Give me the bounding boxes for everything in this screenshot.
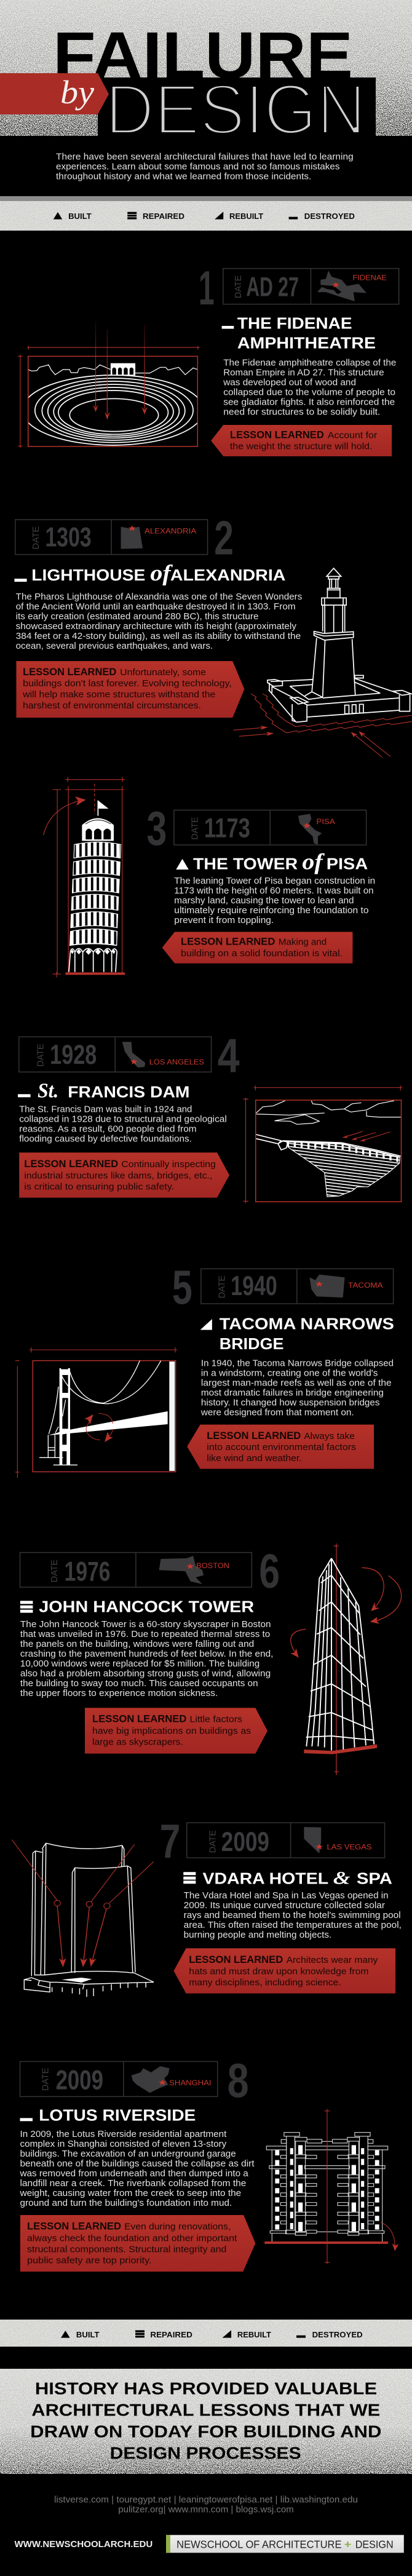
- body text: [223, 358, 396, 417]
- body text: that was unveiled in 1976. Due to repeated thermal stress to: [20, 1630, 270, 1639]
- illustration: leaning tower: [44, 777, 125, 977]
- body text: buildings. The excavation of an underground garage: [20, 2149, 236, 2158]
- callout: lesson learned: public safety are top priority.: [27, 2256, 152, 2265]
- heading: LOTUS RIVERSIDE: [39, 2107, 196, 2124]
- callout: lesson learned: like wind and weather.: [207, 1454, 302, 1463]
- body text: burning people and melting objects.: [184, 1930, 331, 1940]
- date and location box: 1928: [50, 1039, 97, 1070]
- date and location box: 2009: [56, 2064, 103, 2095]
- callout: lesson learned: building on a solid foundation is vital.: [181, 949, 343, 958]
- heading: LIGHTHOUSE: [31, 566, 145, 584]
- body text: [174, 876, 375, 925]
- body text: prevent it from toppling.: [174, 916, 274, 925]
- heading: AMPHITHEATRE: [237, 335, 376, 352]
- callout: lesson learned: LESSON LEARNED: [24, 1159, 118, 1170]
- illustration: dam: [243, 1085, 403, 1203]
- number 6: 6: [259, 1544, 280, 1598]
- body text: also had a problem absorbing strong gusts of wind, allowing: [20, 1669, 271, 1678]
- body text: complex in Shanghai consisted of eleven 13-story: [20, 2139, 227, 2149]
- panel: 4 St. Francis Dam: [18, 1029, 403, 1203]
- body text: the building to sway too much. This caused occupants on: [20, 1679, 258, 1688]
- callout: lesson learned: LESSON LEARNED: [27, 2221, 121, 2232]
- panel: 6 John Hancock Tower: [20, 1544, 402, 1775]
- heading: ALEXANDRIA: [170, 566, 285, 584]
- sources: pulitzer.org| www.mnn.com | blogs.wsj.com: [118, 2505, 294, 2515]
- heading: [183, 1868, 392, 1888]
- callout: lesson learned: [85, 1708, 267, 1754]
- body text: ground and turn the building's foundation into mud.: [20, 2198, 232, 2208]
- body text: The St. Francis Dam was built in 1924 and: [19, 1104, 192, 1114]
- callout: lesson learned: [211, 425, 392, 456]
- number 3: 3: [146, 802, 167, 855]
- callout: lesson learned: [19, 1152, 229, 1198]
- heading: [176, 849, 368, 874]
- heading: [18, 1080, 190, 1102]
- body text: flooding caused by defective foundations.: [19, 1134, 192, 1144]
- callout: lesson learned: LESSON LEARNED: [207, 1430, 301, 1441]
- number 8: 8: [228, 2054, 249, 2107]
- body text: weight, causing water from the creek to seep into the: [20, 2189, 241, 2198]
- date and location box: SHANGHAI: [169, 2079, 212, 2087]
- callout: lesson learned: [16, 661, 244, 718]
- intro text: throughout history and what we learned from those incidents.: [56, 172, 311, 181]
- callout: lesson learned: [187, 1425, 374, 1469]
- red arrow banner: [0, 73, 109, 114]
- heading: THE FIDENAE: [237, 315, 352, 332]
- body text: 1173 with the height of 60 meters. It was built on: [174, 886, 374, 895]
- heading: THE TOWER: [193, 855, 298, 873]
- body text: The leaning Tower of Pisa began construction in: [174, 876, 375, 886]
- panel: 8 Lotus Riverside: [20, 2054, 398, 2272]
- date and location box: DATE: [216, 1275, 227, 1298]
- date and location box: TACOMA: [348, 1282, 383, 1290]
- body text: need for structures to be solidly built.: [223, 407, 380, 417]
- callout: lesson learned: into account environmental factors: [207, 1443, 356, 1452]
- legend: top: REBUILT: [229, 213, 263, 221]
- body text: crashing to the pavement hundreds of feet below. In the end,: [20, 1649, 273, 1659]
- callout: lesson learned: Even during renovations,: [124, 2222, 231, 2232]
- footer: [15, 2535, 404, 2553]
- number 7: 7: [160, 1815, 181, 1868]
- closing heading: DESIGN PROCESSES: [110, 2443, 301, 2462]
- illustration: apartment building: [264, 2109, 398, 2264]
- date and location box: LOS ANGELES: [149, 1058, 204, 1066]
- date and location box: DATE: [207, 1830, 218, 1853]
- date and location box: FIDENAE: [352, 274, 387, 282]
- body text: history. It changed how suspension bridges: [201, 1398, 379, 1408]
- date and location box: DATE: [189, 817, 200, 840]
- number 2: 2: [214, 511, 234, 565]
- intro text: [56, 152, 354, 181]
- date and location box: DATE: [31, 526, 41, 549]
- panel: 7 Vdara Hotel & Spa: [12, 1815, 402, 1997]
- callout: lesson learned: Making and: [279, 937, 327, 947]
- body text: [16, 592, 302, 651]
- heading: St.: [38, 1080, 58, 1102]
- date and location box: LAS VEGAS: [327, 1843, 372, 1852]
- intro text: There have been several architectural failures that have led to learning: [56, 152, 354, 162]
- body text: the upper floors to experience motion sickness.: [20, 1689, 218, 1698]
- callout: lesson learned: the weight the structure will hold.: [230, 442, 372, 451]
- title: DESIGN: DESIGN: [105, 69, 366, 149]
- callout: lesson learned: [173, 1948, 395, 1994]
- legend: top: [0, 196, 412, 231]
- callout: lesson learned: LESSON LEARNED: [189, 1954, 283, 1965]
- body text: ultimately require reinforcing the foundation to: [174, 906, 369, 915]
- logo: Newschool of Architecture + Design: DESIGN: [355, 2538, 394, 2551]
- panel: 2 Lighthouse of Alexandria: [15, 511, 412, 758]
- panel: 3 Tower of Pisa: [44, 777, 375, 977]
- callout: lesson learned: large as skyscrapers.: [92, 1737, 183, 1747]
- callout: lesson learned: Unfortunately, some: [120, 668, 206, 677]
- date and location box: DATE: [35, 1044, 46, 1067]
- date and location box: AD 27: [246, 272, 299, 302]
- body text: landfill near a creek. The riverbank collapsed from the: [20, 2179, 246, 2188]
- body text: The Pharos Lighthouse of Alexandria was one of the Seven Wonders: [16, 592, 302, 601]
- logo: Newschool of Architecture + Design: NEWSCHOOL OF ARCHITECTURE: [176, 2538, 341, 2551]
- callout: lesson learned: Continually inspecting: [121, 1160, 216, 1169]
- panel: 1 Fidenae Amphitheatre: [18, 261, 399, 456]
- body text: was developed out of wood and: [223, 378, 356, 387]
- date and location box: DATE: [40, 2067, 50, 2091]
- callout: lesson learned: LESSON LEARNED: [92, 1714, 187, 1725]
- legend: top: REPAIRED: [143, 213, 184, 221]
- heading: [15, 561, 285, 586]
- callout: lesson learned: LESSON LEARNED: [230, 429, 324, 441]
- body text: [200, 1358, 394, 1417]
- callout: lesson learned: is critical to ensuring public safety.: [24, 1182, 174, 1192]
- callout: lesson learned: Architects wear many: [287, 1956, 378, 1965]
- date and location box: [19, 1037, 212, 1072]
- body text: its early creation (estimated around 280 BC), this structure: [16, 612, 258, 621]
- heading: PISA: [327, 855, 368, 873]
- panel: header: [0, 0, 412, 149]
- black plate behind DESIGN: [98, 77, 376, 137]
- date and location box: PISA: [316, 818, 335, 826]
- illustration: Vdara hotel: [12, 1840, 154, 1997]
- callout: lesson learned: structural components. Structural integrity and: [27, 2245, 226, 2254]
- legend: top: DESTROYED: [304, 213, 355, 221]
- heading: JOHN HANCOCK TOWER: [39, 1598, 254, 1616]
- illustration: leaning skyscraper: [290, 1544, 402, 1775]
- body text: [20, 2130, 255, 2208]
- date and location box: [174, 810, 366, 845]
- legend: bottom: [0, 2320, 412, 2347]
- date and location box: 1940: [231, 1270, 277, 1301]
- body text: of the Ancient World until an earthquake destroyed it in 1303. From: [16, 602, 296, 611]
- date and location box: 2009: [221, 1826, 269, 1857]
- callout: lesson learned: will help make some structures withstand the: [22, 690, 215, 699]
- body text: [20, 1620, 273, 1698]
- body text: the panels on the building, windows were falling out and: [20, 1639, 254, 1649]
- logo: Newschool of Architecture + Design: +: [344, 2538, 351, 2551]
- script: by: by: [60, 74, 94, 111]
- heading: [222, 315, 376, 352]
- body text: In 2009, the Lotus Riverside residential apartment: [20, 2130, 227, 2139]
- heading: SPA: [357, 1870, 392, 1887]
- body text: 10,000 windows were replaced for $5 million. The building: [20, 1659, 259, 1668]
- date and location box: [15, 520, 208, 555]
- callout: lesson learned: harshest of environmental circumstances.: [23, 701, 201, 710]
- heading: &: [333, 1868, 351, 1888]
- callout: lesson learned: buildings don't last forever. Evolving technology,: [23, 679, 232, 688]
- illustration: lighthouse: [233, 568, 412, 758]
- callout: lesson learned: LESSON LEARNED: [181, 937, 275, 948]
- number 4: 4: [218, 1029, 240, 1082]
- date and location box: BOSTON: [196, 1562, 229, 1570]
- heading: FRANCIS DAM: [68, 1084, 190, 1101]
- panel: closing statement: [0, 2369, 412, 2474]
- sources: listverse.com | touregypt.net | leaningtowerofpisa.net | lib.washington.edu: [54, 2495, 358, 2505]
- body text: was removed from underneath and then dumped into a: [20, 2169, 249, 2178]
- illustration: amphitheatre: [18, 322, 204, 448]
- body text: 384 feet or a 42-story building), as well as its ability to withstand the: [16, 632, 301, 641]
- date and location box: ALEXANDRIA: [145, 527, 197, 536]
- callout: lesson learned: [162, 932, 352, 964]
- body text: The John Hancock Tower is a 60-story skyscraper in Boston: [20, 1620, 271, 1629]
- legend: bottom: REPAIRED: [150, 2331, 192, 2339]
- body text: in a windstorm, creating one of the world's: [201, 1368, 378, 1378]
- date and location box: [201, 1269, 394, 1304]
- number 5: 5: [172, 1261, 192, 1314]
- callout: lesson learned: industrial structures like dams, bridges, etc.,: [24, 1171, 212, 1181]
- body text: marshy land, causing the tower to lean and: [174, 896, 354, 905]
- date and location box: 1303: [45, 521, 92, 552]
- body text: collapsed in 1928 due to structural and geological: [19, 1114, 227, 1124]
- heading: of: [150, 561, 173, 586]
- illustration: suspension bridge: [15, 1347, 177, 1478]
- date and location box: [20, 1553, 252, 1587]
- intro text: experiences. Learn about some famous and not so famous mistakes: [56, 162, 339, 172]
- sources: [54, 2495, 358, 2515]
- date and location box: 1173: [204, 813, 250, 843]
- panel: 5 Tacoma Narrows Bridge: [15, 1261, 394, 1478]
- date and location box: DATE: [49, 1559, 59, 1582]
- heading: VDARA HOTEL: [202, 1870, 328, 1887]
- callout: lesson learned: [20, 2215, 255, 2272]
- body text: beneath one of the buildings caused the collapse as dirt: [20, 2159, 255, 2168]
- callout: lesson learned: have big implications on buildings as: [92, 1726, 251, 1736]
- heading: [200, 1315, 394, 1353]
- callout: lesson learned: hats and must draw upon knowledge from: [189, 1967, 369, 1976]
- callout: lesson learned: Always take: [304, 1432, 355, 1441]
- logo: Newschool of Architecture + Design: [166, 2535, 404, 2553]
- body text: [19, 1104, 227, 1144]
- panel: intro: [0, 136, 412, 196]
- legend: bottom: REBUILT: [237, 2331, 271, 2339]
- body text: showcased extraordinary architecture with its height (approximately: [16, 622, 297, 631]
- callout: lesson learned: Account for: [328, 430, 378, 440]
- date and location box: 1976: [65, 1556, 110, 1587]
- date and location box: [187, 1823, 385, 1858]
- legend: bottom: BUILT: [76, 2331, 100, 2339]
- date and location box: [223, 269, 399, 304]
- body text: reasons. As a result, 600 people died from: [19, 1124, 197, 1134]
- legend: top: BUILT: [68, 213, 92, 221]
- panel: 1 Fidenae Amphitheatre: 1: [199, 261, 215, 315]
- date and location box: DATE: [232, 275, 243, 298]
- callout: lesson learned: many disciplines, including science.: [189, 1978, 341, 1987]
- body text: ocean, several previous earthquakes, and wars.: [16, 641, 213, 651]
- heading: of: [302, 849, 325, 874]
- date and location box: [20, 2061, 218, 2096]
- body text: were designed from that moment on.: [200, 1408, 354, 1417]
- legend: bottom: DESTROYED: [312, 2331, 363, 2339]
- heading: BRIDGE: [220, 1335, 283, 1353]
- callout: lesson learned: LESSON LEARNED: [23, 667, 116, 678]
- callout: lesson learned: Little factors: [190, 1714, 242, 1724]
- body text: [184, 1891, 402, 1940]
- title: FAILURE: FAILURE: [53, 18, 353, 92]
- callout: lesson learned: always check the foundation and other important: [27, 2233, 237, 2243]
- closing heading: [30, 2379, 381, 2462]
- website url: WWW.NEWSCHOOLARCH.EDU: [15, 2539, 153, 2549]
